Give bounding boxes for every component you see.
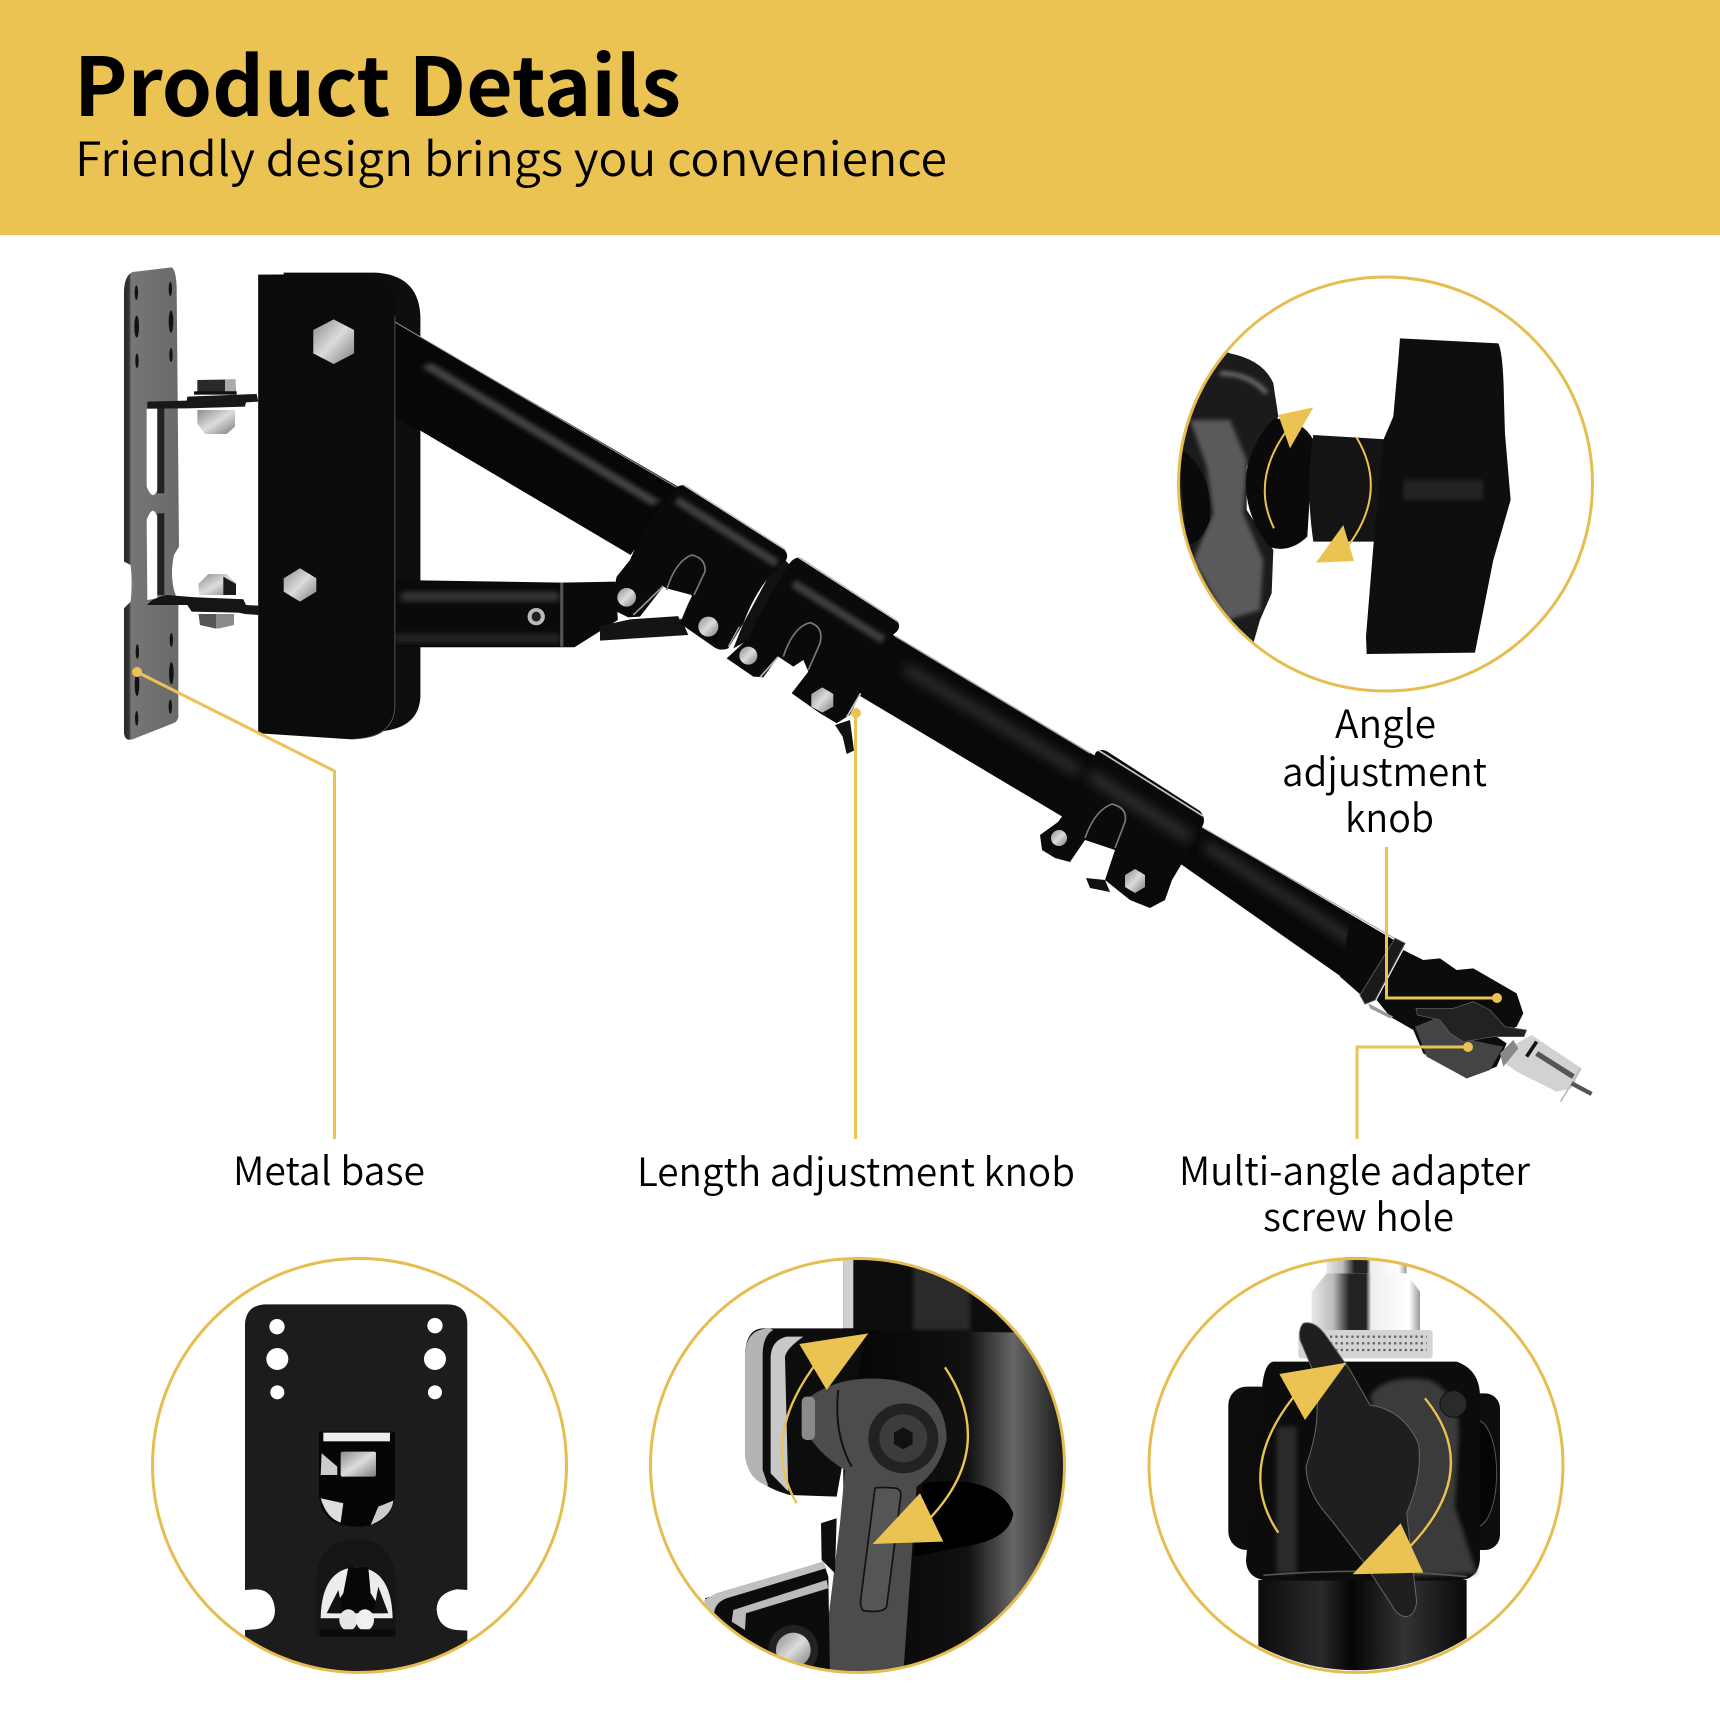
ball head body xyxy=(1180,352,1278,642)
lower strut xyxy=(395,580,618,647)
hex screw xyxy=(868,1403,938,1473)
slots xyxy=(147,409,157,495)
butterfly knob xyxy=(1300,1323,1419,1617)
subtitle: Friendly design brings you convenience xyxy=(75,121,947,190)
upper tube xyxy=(395,322,679,555)
collar xyxy=(1360,938,1405,1004)
rear plate xyxy=(284,273,420,732)
tube tip xyxy=(1340,920,1397,1000)
leader: multi-angle adapter xyxy=(1357,1042,1473,1139)
label: angle adjustment knob xyxy=(1282,694,1487,844)
front plate xyxy=(258,274,395,739)
bolt xyxy=(284,568,316,602)
product: wall mount boom arm xyxy=(124,267,1592,1102)
label: multi-angle adapter screw hole: Multi-angle adapter xyxy=(1179,1141,1530,1197)
label: angle adjustment knob: Angle xyxy=(1335,694,1436,750)
leader: length adjustment knob xyxy=(851,708,861,1139)
detail circle: angle adjustment knob xyxy=(1170,277,1592,691)
label: angle adjustment knob: knob xyxy=(1345,788,1434,844)
head body xyxy=(1246,1362,1480,1581)
clamp body xyxy=(843,1330,1070,1673)
collar xyxy=(1246,418,1313,549)
bolt xyxy=(313,319,354,364)
lower clamp tab xyxy=(705,1562,830,1673)
mounting holes xyxy=(266,1318,446,1399)
telescoping clamps xyxy=(600,485,899,754)
butterfly knob xyxy=(1416,1002,1527,1042)
plate xyxy=(245,1304,467,1673)
lower tube xyxy=(1175,826,1394,992)
knurled ring xyxy=(1298,1330,1433,1358)
header banner xyxy=(0,0,1720,235)
clamp 2 xyxy=(727,557,899,754)
wing knob xyxy=(1366,338,1511,654)
upper bracket xyxy=(147,394,258,409)
rotation arrows xyxy=(1260,1363,1451,1574)
label: multi-angle adapter screw hole xyxy=(1179,1141,1530,1243)
middle tube xyxy=(850,620,1112,826)
label: length adjustment knob: Length adjustment knob xyxy=(637,1142,1075,1198)
chrome stud xyxy=(1505,1035,1582,1092)
rotation arrows xyxy=(1265,407,1371,563)
detail circle: metal base xyxy=(152,1258,566,1673)
metal base plate and brackets xyxy=(124,267,258,740)
lever xyxy=(802,1379,947,1673)
label: metal base: Metal base xyxy=(233,1141,425,1197)
tube xyxy=(843,1260,1014,1332)
length knob lever xyxy=(835,720,854,754)
end fitting xyxy=(1340,920,1592,1102)
detail circle: multi-angle adapter screw hole xyxy=(1149,1253,1563,1677)
lower tube and third clamp xyxy=(1040,750,1394,992)
slot shadow xyxy=(913,1481,1013,1557)
lower barrel xyxy=(1258,1580,1467,1677)
mounting plates and arm xyxy=(258,273,679,739)
neck xyxy=(1309,435,1387,542)
upper slot xyxy=(319,1432,395,1527)
head body xyxy=(1377,950,1523,1078)
clamp 3 xyxy=(1040,750,1204,908)
label: angle adjustment knob: adjustment xyxy=(1282,742,1487,798)
lower bracket xyxy=(198,574,236,595)
lock lever xyxy=(600,616,688,641)
rotation arrows xyxy=(782,1333,968,1544)
detail circle: length adjustment knob xyxy=(650,1253,1070,1675)
label: multi-angle adapter screw hole: screw hole xyxy=(1263,1187,1454,1243)
leader: angle adjustment knob xyxy=(1386,847,1502,1003)
clamp 1 xyxy=(610,485,790,650)
title: Product Details xyxy=(74,23,681,140)
side ports xyxy=(1228,1386,1262,1550)
clamp tab xyxy=(745,1328,863,1497)
lower slot xyxy=(316,1539,396,1637)
leader: metal base xyxy=(132,667,334,1139)
chrome neck xyxy=(1326,1257,1407,1274)
